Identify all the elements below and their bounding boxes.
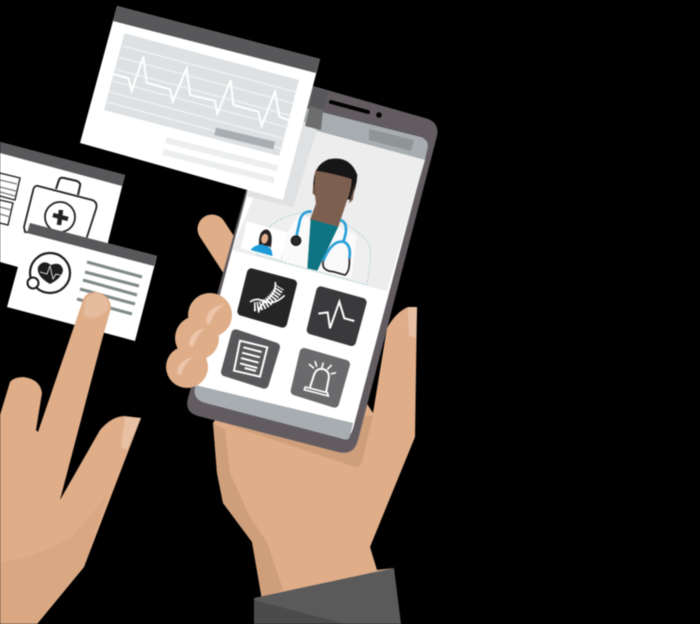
ears: [313, 182, 355, 203]
speaker: [331, 102, 368, 112]
lab coat: [257, 213, 370, 285]
card header: [0, 142, 125, 186]
patient top: [251, 244, 272, 256]
card header: [113, 6, 320, 73]
icon: medical kit: [24, 178, 96, 240]
ECG line: [113, 57, 290, 126]
holding fingers: [166, 293, 232, 388]
gray bar: [214, 128, 275, 149]
app icons: [225, 273, 362, 403]
record lines icon: [0, 173, 20, 225]
icon: alarm beacon: [295, 352, 346, 403]
heart health card: [7, 223, 157, 341]
coat front: [280, 213, 357, 278]
screen footer: [195, 385, 353, 440]
phone body: [187, 76, 438, 453]
phone screen: [195, 100, 428, 439]
text placeholder lines: [163, 140, 278, 180]
palm shade: [0, 495, 107, 624]
right hand holding phone: [213, 300, 417, 600]
smartphone: [187, 76, 438, 453]
doctor on video call: [257, 159, 370, 285]
icon: document: [225, 334, 276, 384]
screen header: [284, 104, 428, 160]
patient hair: [259, 229, 272, 248]
teal shirt: [307, 219, 338, 271]
index finger behind phone: [212, 229, 240, 272]
fingernail on index: [84, 293, 109, 318]
card header shadow on phone: [305, 88, 328, 130]
card shadow on phone: [246, 100, 317, 207]
text placeholder lines: [77, 262, 142, 314]
ECG report card: [80, 6, 320, 200]
chart background: [104, 33, 299, 156]
header button: [369, 129, 414, 151]
medical kit card: [0, 142, 125, 290]
finger highlights: [177, 305, 225, 375]
neck and face: [310, 171, 352, 227]
icon: heart in circle: [28, 253, 70, 293]
camera: [376, 112, 382, 118]
patient video inset: [241, 221, 287, 259]
stethoscope: [291, 212, 350, 275]
shirt cuff: [254, 568, 401, 624]
patient face: [260, 233, 269, 244]
video panel: [232, 122, 425, 291]
icon: DNA: [242, 273, 293, 323]
left hand pointing: [0, 292, 141, 624]
thumbnail: [121, 417, 141, 450]
hair: [314, 159, 357, 200]
card header: [27, 223, 157, 266]
icon: pulse: [311, 291, 362, 342]
